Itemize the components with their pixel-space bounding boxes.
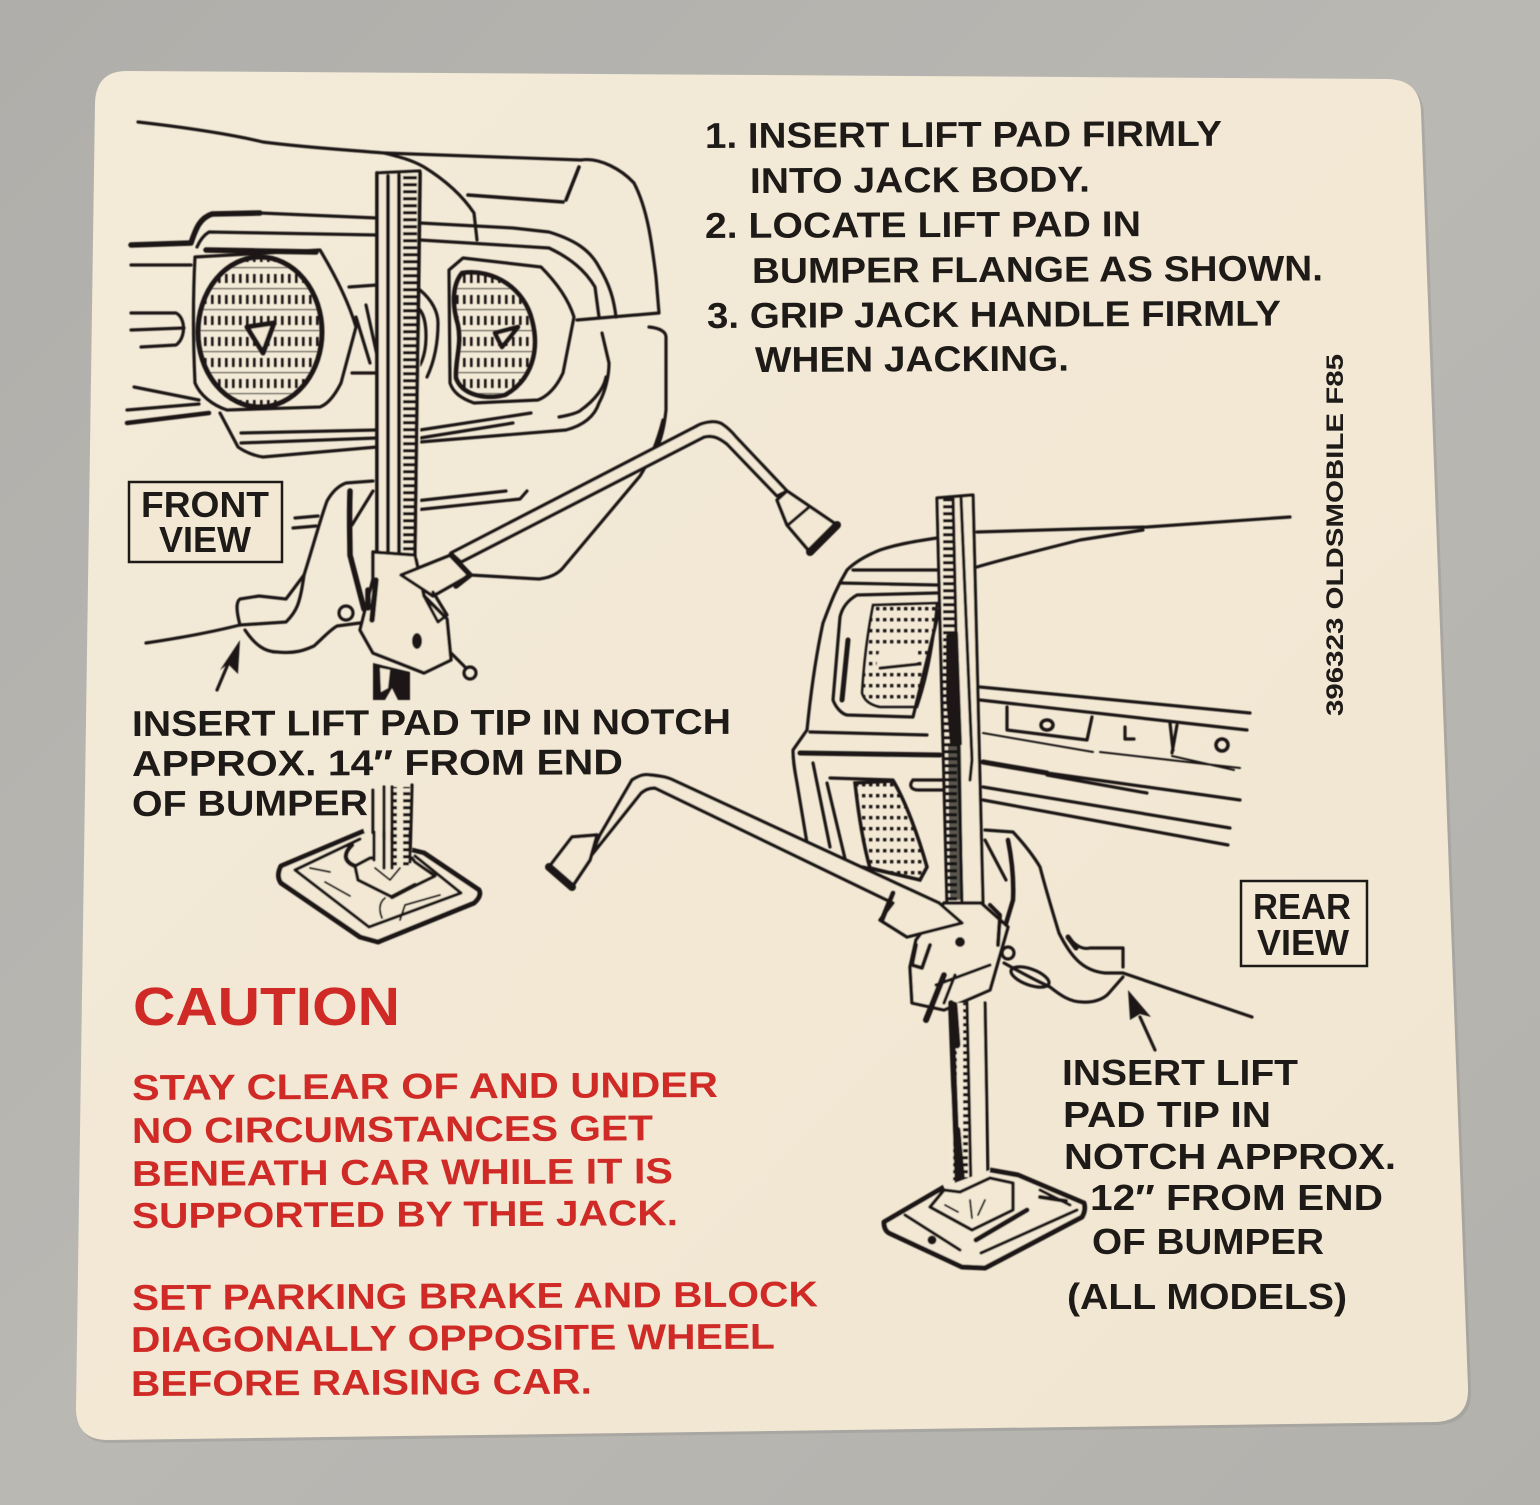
rear view label box bbox=[1241, 881, 1367, 966]
numbered instructions bbox=[705, 113, 1323, 380]
part number vertical text: 396323 OLDSMOBILE F85 bbox=[1322, 354, 1349, 716]
caution text block 2 bbox=[131, 1273, 818, 1404]
front view label box: FRONT bbox=[141, 484, 269, 525]
rear jack body bbox=[910, 903, 1014, 1020]
jack handle bbox=[451, 422, 837, 562]
numbered instructions: WHEN JACKING. bbox=[755, 338, 1069, 380]
rear jack handle bbox=[549, 775, 962, 937]
rear notch instruction: 12″ FROM END bbox=[1090, 1177, 1383, 1218]
caution text block 2: DIAGONALLY OPPOSITE WHEEL bbox=[131, 1316, 775, 1360]
caution text block 1 bbox=[132, 1064, 718, 1236]
jack mast bbox=[377, 171, 420, 558]
left headlamp bbox=[194, 250, 356, 410]
front notch instruction: APPROX. 14″ FROM END bbox=[132, 741, 623, 784]
rear bumper flange line bbox=[985, 830, 1252, 1017]
caution text block 1: SUPPORTED BY THE JACK. bbox=[132, 1192, 678, 1236]
rear notch instruction: PAD TIP IN bbox=[1063, 1094, 1271, 1135]
rear lower column bbox=[951, 1003, 988, 1190]
grille between lamps bbox=[349, 285, 438, 377]
rear view illustration bbox=[549, 495, 1290, 1268]
lower tail lamp bbox=[827, 778, 943, 880]
rear notch instruction: NOTCH APPROX. bbox=[1064, 1136, 1396, 1177]
caution heading: CAUTION bbox=[133, 977, 400, 1037]
rear notch instruction bbox=[1062, 1052, 1396, 1317]
numbered instructions: INTO JACK BODY. bbox=[750, 159, 1090, 201]
bumper flange line bbox=[146, 481, 373, 643]
front notch instruction bbox=[132, 701, 731, 824]
front view label box: VIEW bbox=[159, 519, 251, 560]
rear notch instruction: INSERT LIFT bbox=[1062, 1052, 1298, 1093]
front jack base plate bbox=[278, 831, 480, 942]
rear jack base plate bbox=[884, 1170, 1085, 1268]
front view label box bbox=[129, 482, 282, 562]
caution text block 1: BENEATH CAR WHILE IT IS bbox=[132, 1150, 673, 1194]
numbered instructions: BUMPER FLANGE AS SHOWN. bbox=[752, 248, 1323, 291]
caution text block 2: SET PARKING BRAKE AND BLOCK bbox=[132, 1273, 818, 1318]
front notch instruction: INSERT LIFT PAD TIP IN NOTCH bbox=[132, 701, 731, 744]
jack body bbox=[360, 552, 476, 700]
rear car body outline bbox=[793, 517, 1290, 847]
numbered instructions: 1. INSERT LIFT PAD FIRMLY bbox=[705, 113, 1222, 156]
numbered instructions: 3. GRIP JACK HANDLE FIRMLY bbox=[707, 292, 1281, 336]
OLD badge bbox=[1007, 707, 1228, 753]
rear notch instruction: (ALL MODELS) bbox=[1067, 1276, 1347, 1317]
lower jack column bbox=[373, 785, 412, 865]
rear view label box: REAR bbox=[1253, 886, 1351, 927]
caution text block 2: BEFORE RAISING CAR. bbox=[131, 1361, 592, 1404]
caution text block 1: STAY CLEAR OF AND UNDER bbox=[132, 1064, 718, 1108]
arrow: front notch bbox=[217, 640, 240, 690]
rear notch instruction: OF BUMPER bbox=[1092, 1221, 1324, 1262]
upper tail lamp bbox=[833, 593, 940, 717]
car front body outline bbox=[127, 122, 666, 457]
front notch instruction: OF BUMPER bbox=[132, 782, 368, 824]
arrow: rear notch bbox=[1128, 990, 1155, 1050]
numbered instructions: 2. LOCATE LIFT PAD IN bbox=[705, 203, 1141, 246]
rear view label box: VIEW bbox=[1257, 922, 1349, 963]
rear jack mast bbox=[937, 495, 983, 910]
front view illustration bbox=[127, 122, 837, 942]
caution text block 1: NO CIRCUMSTANCES GET bbox=[132, 1107, 653, 1151]
right headlamp bbox=[449, 258, 574, 403]
